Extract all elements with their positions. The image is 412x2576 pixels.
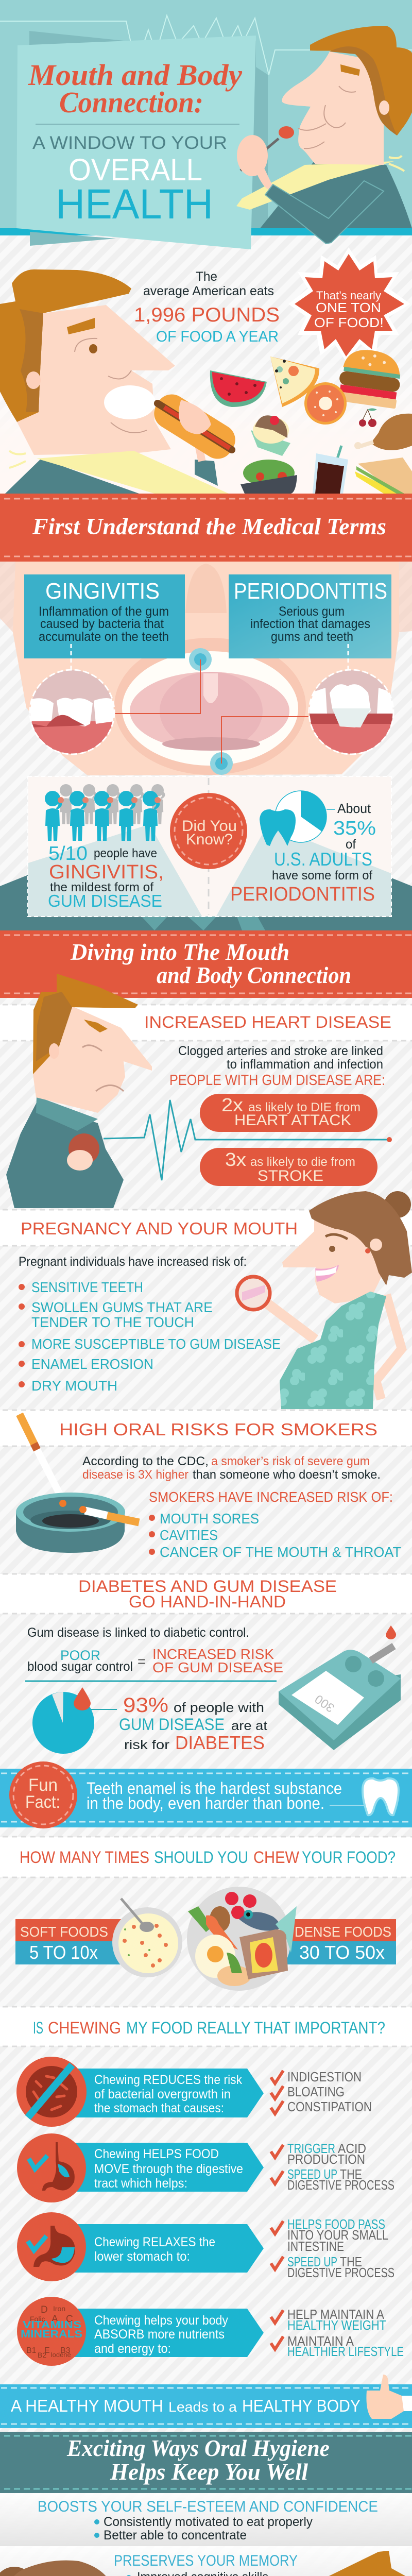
text: 93 percent statistic: GUM DISEASE: [119, 1715, 225, 1734]
banner: a healthy mouth leads to a healthy body: A HEALTHY MOUTH: [11, 2396, 163, 2415]
box: periodontitis definition: [229, 574, 391, 658]
list: pregnancy risks: ENAMEL EROSION: [31, 1356, 153, 1372]
illustration: plate of dense food: [187, 1887, 297, 1991]
list: pregnancy risks: [19, 1279, 281, 1394]
row: helps food move: MOVE through the digestive: [94, 2162, 243, 2176]
text: boosts self esteem: Better able to concentrate: [104, 2528, 247, 2543]
illustration: face: [0, 562, 412, 775]
illustration: man holding chest: [6, 974, 152, 1208]
row: relaxes lower stomach: [17, 2212, 394, 2281]
heading row: CHEWING: [48, 2019, 121, 2037]
heading row: [0, 1410, 412, 1446]
box: gingivitis definition: Inflammation of the gum: [39, 604, 169, 619]
heading row: [0, 1574, 412, 1614]
illustration: glucose meter: [279, 1625, 401, 1750]
illustration: ashtray with cigarettes: [16, 1414, 139, 1553]
text: boosts self esteem: [38, 2498, 378, 2543]
section: pregnancy and your mouth: [0, 1191, 412, 1409]
list: relax benefits: INTO YOUR SMALL: [287, 2227, 388, 2243]
text: periodontitis statistic: U.S. ADULTS: [274, 849, 372, 870]
list: smoker risks: CAVITIES: [160, 1527, 218, 1543]
box: periodontitis definition: PERIODONTITIS: [234, 579, 387, 604]
panel: did you know: [0, 776, 412, 930]
stat text: 1,996 pounds: The: [196, 269, 217, 284]
panel: food fact: [0, 247, 412, 494]
heading row: PREGNANCY AND YOUR MOUTH: [21, 1219, 298, 1238]
text: clogged arteries: Clogged arteries and stroke are linked: [178, 1044, 383, 1058]
stat text: 1,996 pounds: [134, 269, 280, 345]
text: periodontitis statistic: have some form of: [272, 869, 372, 883]
box: gingivitis definition: [24, 574, 185, 658]
pill: 2x heart attack: as likely to DIE from: [248, 1100, 360, 1114]
text: risk intro: Pregnant individuals have increased risk of:: [19, 1255, 247, 1269]
icon: watermelon: [210, 370, 267, 407]
banner: a healthy mouth leads to a healthy body: [0, 2375, 412, 2428]
text: CDC statement: a smoker’s risk of severe gum: [211, 1454, 370, 1468]
banner: diving into the mouth: and Body Connection: [157, 962, 351, 988]
heading row: DIABETES AND GUM DISEASE: [78, 1577, 337, 1596]
box: periodontitis definition: infection that damages: [250, 617, 370, 631]
icon: vitamins and minerals: VITAMINS: [23, 2319, 81, 2331]
banner: exciting ways oral hygiene: Exciting Ways Oral Hygiene: [66, 2435, 330, 2461]
icon: vitamins and minerals: Iron: [53, 2304, 65, 2313]
icon: sandwich: [355, 457, 412, 494]
marker: bottom pointer: [210, 717, 309, 775]
icon: vitamins and minerals: E: [44, 2346, 50, 2355]
box: periodontitis definition: gums and teeth: [271, 630, 353, 644]
badge: fun fact: Fact:: [25, 1792, 60, 1812]
icon: vitamins and minerals: Iodene: [50, 2351, 71, 2359]
icon: donut: [304, 382, 347, 425]
illustration: glucose meter: 300: [313, 1692, 337, 1715]
box: gingivitis definition: accumulate on the teeth: [39, 630, 169, 644]
list: digestion benefits: PRODUCTION: [287, 2151, 365, 2167]
label: soft foods: 5 TO 10x: [29, 1942, 98, 1963]
text: 93 percent statistic: [119, 1694, 267, 1753]
heading row: [0, 1210, 412, 1246]
icon: vitamins and minerals: [17, 2297, 86, 2366]
icon: pizza: [270, 357, 319, 407]
row: reduces bacteria: Chewing REDUCES the risk: [94, 2073, 242, 2087]
text: gingivitis statistic: GINGIVITIS,: [49, 861, 164, 883]
text: gingivitis statistic: GUM DISEASE: [48, 891, 162, 910]
list: absorb benefits: MAINTAIN A: [287, 2333, 354, 2349]
badge: did you know: Know?: [186, 831, 233, 848]
section: increased heart disease: [0, 974, 412, 1208]
text: periodontitis statistic: of: [346, 837, 356, 852]
illustration: pregnant woman with mirror: [237, 1191, 412, 1409]
banner: exciting ways oral hygiene: [0, 2432, 412, 2493]
text: blood sugar equation: INCREASED RISK: [152, 1646, 274, 1662]
banner: exciting ways oral hygiene: Helps Keep You Well: [110, 2459, 308, 2485]
text: blood sugar equation: =: [138, 1653, 146, 1669]
row: helps food move: Chewing HELPS FOOD: [94, 2147, 219, 2161]
text: gingivitis statistic: people have: [94, 846, 157, 860]
section: is chewing my food really that important: [0, 2007, 412, 2366]
banner: first understand the medical terms: First Understand the Medical Terms: [32, 513, 386, 539]
panel: hero header: [0, 0, 412, 249]
starburst callout: one ton: That’s nearly: [316, 289, 381, 302]
list: smoker risks: [149, 1511, 401, 1560]
list: pregnancy risks: MORE SUSCEPTIBLE TO GUM DISEASE: [31, 1336, 281, 1352]
icon: thumbs up: [366, 2375, 412, 2419]
banner: fun fact: [0, 1761, 412, 1828]
list: relax benefits: INTESTINE: [287, 2239, 344, 2254]
list: absorb benefits: [271, 2307, 404, 2359]
heading row: IS: [33, 2019, 43, 2037]
heading row: GO HAND-IN-HAND: [129, 1592, 286, 1611]
banner: a healthy mouth leads to a healthy body: Leads to a: [168, 2399, 237, 2415]
illustration: man eating broccoli: [279, 2551, 412, 2576]
icon: vitamins and minerals: B1: [26, 2346, 37, 2355]
list: relax benefits: [271, 2216, 394, 2280]
label: dense foods: [286, 1919, 396, 1964]
list: bacterial effects: BLOATING: [287, 2084, 345, 2099]
title text: [28, 58, 242, 228]
badge: fun fact: [9, 1761, 77, 1828]
row: reduces bacteria: of bacterial overgrowth in: [94, 2087, 231, 2102]
list: bacterial effects: CONSTIPATION: [287, 2099, 372, 2114]
list: pregnancy risks: SENSITIVE TEETH: [31, 1279, 143, 1295]
icon: vitamins and minerals: C: [66, 2314, 73, 2325]
text: preserves memory: PRESERVES YOUR MEMORY: [114, 2552, 298, 2569]
text: gingivitis statistic: [48, 843, 164, 910]
list: pregnancy risks: DRY MOUTH: [31, 1378, 117, 1394]
section: high oral risks for smokers: [0, 1410, 412, 1560]
text: 93 percent statistic: 93%: [123, 1694, 168, 1717]
text: blood sugar equation: blood sugar control: [27, 1659, 133, 1674]
row: absorb nutrients: [17, 2297, 404, 2366]
starburst callout: one ton: ONE TON: [316, 300, 381, 315]
row: relaxes lower stomach: Chewing RELAXES the: [94, 2235, 215, 2249]
box: gingivitis definition: GINGIVITIS: [45, 579, 160, 604]
stat text: 1,996 pounds: OF FOOD A YEAR: [156, 328, 279, 345]
badge: fun fact: Fun: [28, 1775, 58, 1795]
icon: vitamins and minerals: Folic: [30, 2315, 45, 2323]
illustration: jacket band: [0, 874, 412, 930]
illustration: man with hot dog: [0, 269, 245, 494]
text: clogged arteries: PEOPLE WITH GUM DISEASE ARE:: [169, 1072, 385, 1089]
icon: tooth: [363, 1778, 399, 1815]
icon: vitamins and minerals: A: [52, 2314, 58, 2325]
text: blood sugar equation: Gum disease is linked to diabetic control.: [27, 1625, 249, 1640]
row: reduces bacteria: [16, 2057, 372, 2127]
pill: 2x heart attack: 2x: [221, 1094, 243, 1115]
banner: first understand the medical terms: [0, 494, 412, 562]
list: bacterial effects: [271, 2069, 372, 2114]
row: absorb nutrients: and energy to:: [94, 2342, 171, 2356]
text: CDC statement: According to the CDC,: [82, 1454, 209, 1468]
text: periodontitis statistic: 35%: [333, 818, 376, 839]
heading row: [0, 1837, 412, 1877]
title text: A WINDOW TO YOUR: [32, 133, 227, 153]
list: pregnancy risks: TENDER TO THE TOUCH: [31, 1314, 194, 1330]
icon: vitamins and minerals: B2: [38, 2351, 46, 2359]
text: periodontitis statistic: About: [337, 801, 371, 816]
text: enamel fact: Teeth enamel is the hardest substance: [87, 1779, 342, 1798]
list: digestion benefits: ACID: [338, 2141, 366, 2156]
list: digestion benefits: SPEED UP: [287, 2166, 337, 2182]
heading row: [0, 2007, 412, 2046]
row: helps food move: tract which helps:: [94, 2176, 187, 2191]
text: enamel fact: [87, 1779, 342, 1812]
label: soft foods: [15, 1919, 124, 1964]
section: diabetes and gum disease: [0, 1574, 412, 1754]
text: enamel fact: in the body, even harder than bone.: [87, 1794, 324, 1812]
row: relaxes lower stomach: lower stomach to:: [94, 2249, 190, 2264]
stat text: 1,996 pounds: 1,996 POUNDS: [134, 304, 280, 326]
icon: burger: [336, 346, 404, 409]
pill: 3x stroke: [200, 1148, 377, 1186]
badge: did you know: Did You: [182, 818, 237, 835]
banner: diving into the mouth: Diving into The Mouth: [70, 939, 289, 965]
heading row: HIGH ORAL RISKS FOR SMOKERS: [59, 1420, 377, 1439]
illustration: man eating: [236, 26, 412, 244]
box: periodontitis definition: Serious gum: [279, 604, 345, 619]
stat text: 1,996 pounds: average American eats: [143, 284, 274, 298]
list: digestion benefits: [271, 2141, 394, 2193]
label: soft foods: SOFT FOODS: [20, 1924, 108, 1940]
heading row: HOW MANY TIMES: [20, 1848, 149, 1867]
title text: Connection:: [59, 86, 203, 119]
section: how many times should you chew: [0, 1837, 412, 1991]
text: CDC statement: SMOKERS HAVE INCREASED RISK OF:: [149, 1489, 393, 1505]
row: reduces bacteria: the stomach that causes:: [94, 2101, 224, 2115]
text: 93 percent statistic: risk for: [124, 1738, 169, 1752]
zoom circle: periodontitis teeth: [309, 670, 393, 755]
icon: vitamins and minerals: D: [41, 2304, 48, 2315]
marker: top pointer: [114, 648, 212, 714]
text: CDC statement: than someone who doesn’t smoke.: [193, 1468, 381, 1482]
text: blood sugar equation: [25, 1625, 283, 1681]
heading row: YOUR FOOD?: [302, 1848, 396, 1867]
banner: diving into the mouth: [0, 930, 412, 998]
text: blood sugar equation: OF GUM DISEASE: [152, 1659, 283, 1675]
heading row: [0, 1005, 412, 1041]
heading row: CHEW: [253, 1848, 300, 1867]
list: digestion benefits: THE: [340, 2166, 362, 2182]
text: boosts self esteem: BOOSTS YOUR SELF-ESTEEM AND CONFIDENCE: [38, 2498, 378, 2515]
illustration: open mouth: [114, 638, 306, 775]
row: helps food move: [17, 2133, 394, 2202]
icon: vitamins and minerals: B3: [60, 2346, 71, 2355]
text: clogged arteries: to inflammation and infection: [227, 1057, 383, 1072]
illustration: woman with salad: [0, 2561, 175, 2576]
icon: cherries: [359, 408, 377, 427]
pill: 3x stroke: as likely to die from: [250, 1155, 355, 1169]
label: dense foods: 30 TO 50x: [299, 1942, 385, 1963]
list: absorb benefits: HEALTHY WEIGHT: [287, 2317, 386, 2333]
list: relax benefits: SPEED UP: [287, 2254, 337, 2269]
text: gingivitis statistic: 5/10: [48, 843, 88, 865]
illustration: bowl of soup: [112, 1899, 182, 1977]
ecg line: [104, 1100, 392, 1180]
list: relax benefits: THE: [340, 2254, 362, 2269]
heading row: SHOULD YOU: [154, 1848, 248, 1867]
text: 93 percent statistic: DIABETES: [175, 1732, 265, 1753]
chart: 93 percent pie: [32, 1687, 117, 1754]
icon: salad: [241, 460, 297, 494]
list: digestion benefits: TRIGGER: [287, 2141, 335, 2156]
pill: 2x heart attack: [200, 1094, 377, 1132]
starburst callout: one ton: [288, 247, 410, 362]
text: CDC statement: [82, 1454, 393, 1505]
list: pregnancy risks: SWOLLEN GUMS THAT ARE: [31, 1299, 213, 1315]
badge: did you know: [170, 793, 247, 869]
panel: medical terms mouth diagram: [0, 562, 412, 775]
heading row: INCREASED HEART DISEASE: [144, 1013, 391, 1031]
list: bacterial effects: INDIGESTION: [287, 2069, 362, 2084]
list: smoker risks: CANCER OF THE MOUTH & THROAT: [160, 1544, 401, 1560]
pill: 2x heart attack: HEART ATTACK: [234, 1112, 351, 1129]
title panel: [16, 36, 256, 249]
title text: HEALTH: [56, 181, 213, 228]
list: absorb benefits: HELP MAINTAIN A: [287, 2307, 385, 2322]
text: periodontitis statistic: [230, 801, 376, 905]
icon: vitamins and minerals: MINERALS: [21, 2329, 82, 2340]
row: absorb nutrients: ABSORB more nutrients: [94, 2327, 225, 2342]
pill: 3x stroke: STROKE: [258, 1167, 323, 1184]
text: 93 percent statistic: are at: [231, 1719, 267, 1733]
text: 93 percent statistic: of people with: [174, 1700, 264, 1715]
icon: stomach with food: [17, 2133, 86, 2202]
list: smoker risks: MOUTH SORES: [160, 1511, 259, 1527]
text: CDC statement: disease is 3X higher: [82, 1468, 188, 1482]
title text: OVERALL: [68, 152, 202, 187]
icon: relaxed stomach: [17, 2212, 86, 2281]
icon: cupcake: [251, 415, 290, 456]
icon: no bacteria: [16, 2057, 87, 2127]
box: gingivitis definition: caused by bacteria that: [40, 617, 164, 631]
chart: 35 percent pie with tooth: [260, 791, 335, 846]
text: preserves memory: [114, 2552, 298, 2576]
text: blood sugar equation: POOR: [60, 1648, 100, 1663]
text: periodontitis statistic: PERIODONTITIS: [230, 884, 375, 905]
section: oral hygiene benefits: [0, 2493, 412, 2576]
starburst callout: one ton: OF FOOD!: [314, 315, 384, 330]
pill: 3x stroke: 3x: [225, 1149, 246, 1170]
banner: a healthy mouth leads to a healthy body: HEALTHY BODY: [242, 2396, 360, 2415]
text: boosts self esteem: Consistently motivated to eat properly: [104, 2515, 313, 2529]
icon: five of ten people: [45, 784, 165, 841]
label: dense foods: DENSE FOODS: [295, 1924, 391, 1940]
text: clogged arteries: [169, 1044, 385, 1089]
zoom circle: gingivitis teeth: [30, 670, 114, 754]
row: absorb nutrients: Chewing helps your body: [94, 2313, 228, 2328]
icon: soda: [313, 446, 348, 494]
list: relax benefits: HELPS FOOD PASS: [287, 2216, 385, 2232]
icon: chicken leg: [354, 414, 412, 450]
text: gingivitis statistic: the mildest form of: [50, 880, 153, 894]
title text: Mouth and Body: [28, 58, 242, 92]
